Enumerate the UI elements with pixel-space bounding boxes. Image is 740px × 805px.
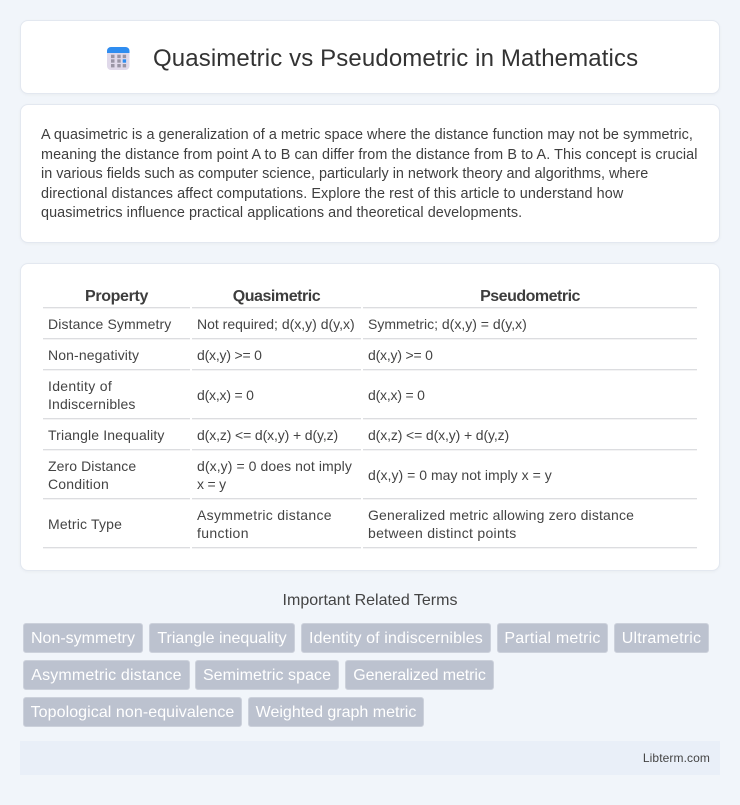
- text: Identity of: [48, 378, 112, 394]
- text: Generalized metric allowing zero distance: [368, 507, 634, 523]
- footer: [20, 741, 720, 775]
- text: Identity of indiscernibles: [309, 630, 483, 647]
- text: Asymmetric distance: [197, 507, 332, 523]
- text: d(x,x) = 0: [197, 387, 254, 403]
- text: d(x,z) <= d(x,y) + d(y,z): [368, 427, 509, 443]
- text: d(x,y) >= 0: [197, 347, 262, 363]
- text: d(x,z) <= d(x,y) + d(y,z): [197, 427, 338, 443]
- text: Semimetric space: [203, 667, 331, 684]
- text: Non-negativity: [48, 347, 139, 363]
- text: Triangle Inequality: [48, 427, 165, 443]
- text: Distance Symmetry: [48, 316, 171, 332]
- table: comparison: Pseudometric: [480, 288, 580, 305]
- text: Symmetric; d(x,y) = d(y,x): [368, 316, 527, 332]
- panel: title header: [20, 20, 720, 94]
- text: Triangle inequality: [157, 630, 287, 647]
- text: function: [197, 525, 249, 541]
- text: in various fields such as computer science, particularly in network theory and algorithms, where: [41, 166, 648, 182]
- text: Weighted graph metric: [256, 704, 416, 721]
- text: Condition: [48, 476, 109, 492]
- text: Partial metric: [504, 630, 601, 647]
- table: comparison: [85, 288, 580, 305]
- table: comparison: Quasimetric: [233, 288, 320, 305]
- table: comparison: Property: [85, 288, 148, 305]
- text: between distinct points: [368, 525, 517, 541]
- text: Ultrametric: [622, 630, 701, 647]
- text: Topological non-equivalence: [31, 704, 234, 721]
- text: directional distances affect computations. Explore the rest of this article to understand how: [41, 186, 623, 202]
- text: Asymmetric distance: [31, 667, 182, 684]
- heading: related terms: Important Related Terms: [283, 592, 457, 609]
- text block: introduction: [41, 127, 698, 221]
- text: d(x,y) = 0 does not imply: [197, 458, 352, 474]
- text: Generalized metric: [353, 667, 486, 684]
- text: Not required; d(x,y) d(y,x): [197, 316, 355, 332]
- text: Metric Type: [48, 516, 122, 532]
- title: Quasimetric vs Pseudometric in Mathematics: [153, 45, 638, 72]
- text: x = y: [197, 476, 226, 492]
- text: Non-symmetry: [31, 630, 135, 647]
- text: meaning the distance from point A to B can differ from the distance from B to A. This concept is crucial: [41, 147, 698, 163]
- panel: comparison table: [20, 263, 720, 571]
- tags: related terms: [23, 623, 709, 727]
- text: d(x,x) = 0: [368, 387, 425, 403]
- panel: introduction: [20, 104, 720, 243]
- text: Zero Distance: [48, 458, 136, 474]
- text: quasimetrics influence practical applications and theoretical developments.: [41, 205, 522, 221]
- text: d(x,y) = 0 may not imply x = y: [368, 467, 552, 483]
- text: A quasimetric is a generalization of a metric space where the distance function may not be symmetric,: [41, 127, 693, 143]
- text: Indiscernibles: [48, 396, 136, 412]
- text: d(x,y) >= 0: [368, 347, 433, 363]
- footer credit: Libterm.com: [643, 751, 710, 765]
- icon: calendar: [107, 47, 130, 70]
